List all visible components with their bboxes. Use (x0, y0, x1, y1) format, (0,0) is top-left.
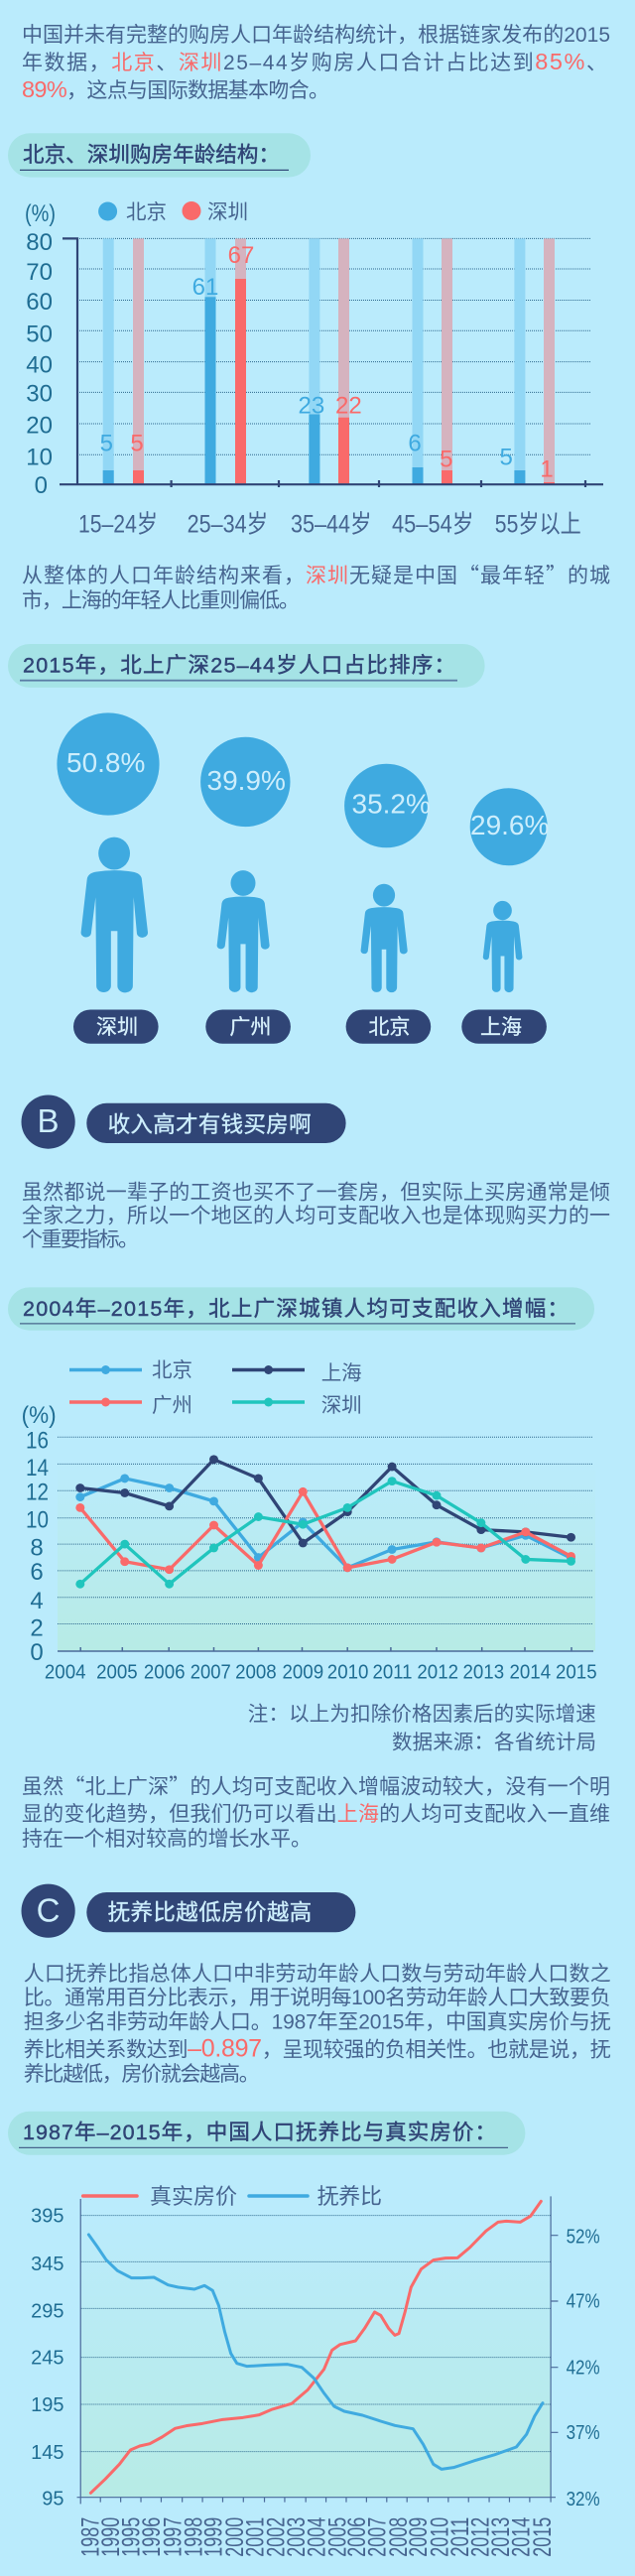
chart legend: 北京 (126, 201, 167, 224)
y axis labels: 0 (35, 472, 48, 499)
value labels: 23 (299, 392, 324, 419)
value labels: 5 (130, 430, 144, 456)
year labels: 2014 (508, 2517, 536, 2557)
series: Shenzhen (75, 1477, 575, 1589)
paragraph: dependency ratio: 人口抚养比指总体人口中非劳动年龄人口数与劳动年龄人口数之 (24, 1963, 611, 1986)
chart legend (22, 1359, 362, 1429)
intro text block (22, 24, 610, 102)
left axis labels: 95 (42, 2489, 64, 2511)
year labels: 2008 (385, 2517, 413, 2557)
year labels: 1987 (77, 2517, 105, 2557)
paragraph: income and purchasing power: 个重要指标。 (22, 1224, 139, 1253)
left axis labels: 145 (31, 2442, 64, 2464)
paragraph: dependency ratio: 担多少名非劳动年龄人口。1987年至2015年，中国真实房价与抚 (24, 2010, 611, 2034)
year labels (77, 2517, 557, 2557)
chart legend: 深圳 (207, 201, 248, 224)
line chart: income growth by city (22, 1359, 597, 1684)
paragraph: dependency ratio: 养比相关系数达到–0.897，呈现较强的负相关性。也就是说，抚 (24, 2034, 611, 2062)
year labels: 1995 (117, 2517, 145, 2557)
right axis labels: 37% (567, 2422, 600, 2444)
paragraph: income and purchasing power: 虽然都说一辈子的工资也买不了一套房，但实际上买房通常是倾 (22, 1177, 610, 1207)
Shenzhen bars (133, 279, 555, 484)
paragraph: dependency ratio (24, 1963, 611, 2086)
x axis labels: 2013 (462, 1662, 504, 1684)
x axis labels: 25–34岁 (188, 510, 268, 538)
background bars (103, 238, 555, 484)
value 39.9%: 39.9% (206, 765, 286, 796)
city figure: Beijing (344, 764, 431, 1044)
right axis labels: 42% (567, 2358, 600, 2380)
person icon (361, 884, 408, 992)
city figure: Shenzhen: 深圳 (96, 1016, 138, 1039)
left axis labels: 395 (31, 2206, 64, 2228)
year labels: 1990 (97, 2517, 125, 2557)
y axis labels: 14 (26, 1455, 49, 1481)
section title (86, 1892, 355, 1932)
year labels: 2010 (426, 2517, 453, 2557)
paragraph: income and purchasing power (22, 1177, 610, 1253)
heading: Beijing Shenzhen age structure (8, 133, 311, 178)
x axis labels (78, 510, 581, 538)
city figure: Beijing: 北京 (368, 1016, 410, 1039)
paragraph: Shenzhen is youngest: 从整体的人口年龄结构来看，深圳无疑是中国“最年轻”的城 (22, 560, 610, 589)
series: Beijing (75, 1475, 575, 1572)
y axis labels: 60 (26, 289, 53, 316)
paragraph: income and purchasing power: 全家之力，所以一个地区的人均可支配收入也是体现购买力的一 (22, 1200, 610, 1229)
x axis labels: 2010 (327, 1662, 368, 1684)
value labels: 5 (500, 445, 513, 471)
value labels: 67 (228, 242, 254, 269)
series: dependency ratio (88, 2235, 543, 2469)
chart legend: (%) (22, 1402, 57, 1429)
x axis labels: 2006 (144, 1662, 185, 1684)
bubble 29.6% (470, 788, 548, 865)
chart frame and grid (77, 2196, 558, 2504)
badge B (21, 1095, 75, 1149)
y axis labels: 20 (26, 412, 53, 439)
chart legend (25, 200, 248, 227)
intro text block: 中国并未有完整的购房人口年龄结构统计，根据链家发布的2015 (22, 24, 610, 47)
year labels: 2013 (487, 2517, 515, 2557)
year labels: 2011 (446, 2517, 474, 2557)
chart legend: 广州 (152, 1394, 192, 1417)
section B header: B (37, 1102, 60, 1139)
year labels: 2003 (283, 2517, 311, 2557)
person icon (81, 837, 148, 992)
x axis labels: 35–44岁 (291, 510, 372, 538)
right axis labels: 47% (567, 2291, 600, 2313)
heading: 2004-2015 income growth (8, 1287, 594, 1331)
year labels: 1997 (159, 2517, 187, 2557)
intro text block: 89%，这点与国际数据基本吻合。 (22, 76, 329, 102)
paragraph: Shenzhen is youngest: 市，上海的年轻人比重则偏低。 (22, 584, 300, 614)
city label (205, 1010, 291, 1044)
left axis labels: 245 (31, 2348, 64, 2370)
year labels: 1999 (199, 2517, 227, 2557)
city label (73, 1010, 159, 1044)
section title (86, 1103, 346, 1143)
right axis labels: 52% (567, 2227, 600, 2249)
value 29.6%: 29.6% (470, 810, 549, 840)
y axis labels: 8 (30, 1535, 44, 1562)
left axis labels: 195 (31, 2394, 64, 2416)
x axis labels: 2004 (45, 1662, 85, 1684)
paragraph: Shanghai income growth: 显的变化趋势，但我们仍可以看出上海的人均可支配收入一直维 (22, 1798, 610, 1828)
heading: 1987-2015 dependency and house prices: 1987年–2015年，中国人口抚养比与真实房价： (23, 2121, 496, 2144)
paragraph: dependency ratio: 比。通常用百分比表示，用于说明每100名劳动年龄人口大致要负 (24, 1987, 611, 2009)
x axis labels: 15–24岁 (78, 510, 158, 538)
year labels: 1998 (181, 2517, 208, 2557)
year labels: 2012 (467, 2517, 495, 2557)
chart note and source: 数据来源：各省统计局 (392, 1725, 596, 1754)
value labels: 61 (192, 274, 218, 301)
year labels: 2006 (343, 2517, 371, 2557)
year labels: 2001 (241, 2517, 269, 2557)
Beijing bars (103, 297, 525, 484)
value labels: 5 (100, 430, 113, 456)
chart legend: 北京 (152, 1359, 192, 1382)
city label (346, 1010, 431, 1044)
x axis labels: 2015 (556, 1662, 597, 1684)
chart legend: 深圳 (321, 1394, 362, 1417)
year labels: 2009 (405, 2517, 433, 2557)
y axis labels: 80 (26, 229, 53, 256)
heading: 2015 population share ranking (8, 644, 485, 688)
y axis labels: 10 (26, 445, 53, 471)
chart note and source (248, 1697, 596, 1754)
value labels: 22 (335, 392, 362, 419)
value labels: 6 (408, 430, 422, 456)
bubble 50.8% (57, 712, 160, 816)
y axis labels: 16 (26, 1427, 49, 1454)
heading: 1987-2015 dependency and house prices (8, 2112, 525, 2155)
city figure: Shenzhen (57, 712, 160, 1044)
badge C (21, 1884, 75, 1938)
bubble 35.2% (344, 764, 429, 847)
x axis labels: 45–54岁 (392, 510, 474, 538)
chart legend (83, 2184, 382, 2209)
year labels: 1996 (138, 2517, 166, 2557)
paragraph: Shanghai income growth (22, 1770, 610, 1853)
paragraph: dependency ratio: 养比越低，房价就会越高。 (24, 2063, 260, 2086)
y axis labels: 70 (26, 259, 53, 286)
paragraph: Shanghai income growth: 持在一个相对较高的增长水平。 (22, 1823, 312, 1853)
city figure: Shanghai: 上海 (480, 1016, 522, 1039)
section B header (21, 1095, 346, 1149)
heading: 2015 population share ranking: 2015年，北上广深25–44岁人口占比排序： (23, 653, 455, 677)
section C header: 抚养比越低房价越高 (108, 1900, 312, 1925)
y axis labels: 50 (26, 322, 53, 348)
x axis labels: 55岁以上 (495, 510, 581, 538)
y axis labels: 12 (26, 1480, 49, 1506)
x axis labels: 2012 (417, 1662, 458, 1684)
bar chart: Beijing vs Shenzhen by age (25, 200, 603, 538)
chart legend: 真实房价 (150, 2184, 237, 2209)
chart note and source: 注：以上为扣除价格因素后的实际增速 (248, 1697, 596, 1727)
x axis labels: 2008 (235, 1662, 277, 1684)
value 35.2%: 35.2% (351, 789, 431, 820)
year labels: 2007 (364, 2517, 392, 2557)
right axis labels (567, 2227, 600, 2511)
y axis labels: 30 (26, 381, 53, 408)
person icon (483, 901, 522, 992)
y axis labels: 2 (30, 1614, 44, 1641)
section C header: C (37, 1892, 60, 1929)
section B header: 收入高才有钱买房啊 (108, 1112, 312, 1137)
left axis labels: 295 (31, 2300, 64, 2322)
year labels: 2005 (324, 2517, 352, 2557)
value labels: 5 (440, 447, 452, 473)
chart legend: 上海 (321, 1361, 362, 1384)
section C header (21, 1884, 355, 1938)
chart legend: (%) (25, 200, 56, 227)
city figure: Shanghai (461, 788, 549, 1044)
value labels: 1 (540, 455, 554, 482)
y axis labels: 0 (30, 1639, 44, 1666)
y axis labels: 4 (30, 1588, 44, 1614)
city figure: Guangzhou: 广州 (229, 1016, 271, 1039)
left axis labels (31, 2206, 64, 2511)
city label (461, 1010, 547, 1044)
y axis labels (26, 1427, 49, 1666)
x axis labels: 2009 (282, 1662, 323, 1684)
value labels (100, 242, 554, 482)
y axis labels (26, 229, 53, 499)
x axis labels: 2011 (373, 1662, 413, 1684)
value 50.8%: 50.8% (66, 747, 145, 778)
x axis labels: 2014 (510, 1662, 551, 1684)
right axis labels: 32% (567, 2489, 600, 2511)
heading: 2004-2015 income growth: 2004年–2015年，北上广深城镇人均可支配收入增幅： (23, 1297, 569, 1321)
paragraph: Shenzhen is youngest (22, 560, 610, 614)
chart legend: 抚养比 (318, 2184, 382, 2209)
bubble 39.9% (200, 737, 290, 827)
left axis labels: 345 (31, 2254, 64, 2275)
year labels: 2015 (529, 2517, 557, 2557)
series: Shanghai (75, 1455, 575, 1547)
year labels: 2004 (303, 2517, 330, 2557)
y axis labels: 10 (26, 1507, 49, 1534)
year labels: 2002 (263, 2517, 291, 2557)
city figure: Guangzhou (200, 737, 291, 1044)
x axis labels (45, 1662, 597, 1684)
series: Guangzhou (75, 1487, 575, 1574)
intro text block: 年数据，北京、深圳25–44岁购房人口合计占比达到85%、 (22, 49, 607, 74)
dual axis line chart: house price and dependency ratio (31, 2184, 600, 2557)
x axis labels: 2005 (96, 1662, 138, 1684)
heading: Beijing Shenzhen age structure: 北京、深圳购房年龄结构： (23, 143, 280, 167)
y axis labels: 6 (30, 1559, 44, 1586)
paragraph: Shanghai income growth: 虽然“北上广深”的人均可支配收入增幅波动较大，没有一个明 (22, 1770, 610, 1800)
x axis labels: 2007 (190, 1662, 231, 1684)
person icon (217, 870, 270, 992)
y axis labels: 40 (26, 352, 53, 379)
year labels: 2000 (221, 2517, 249, 2557)
chart axes (60, 238, 603, 487)
series: real house price (90, 2201, 541, 2493)
